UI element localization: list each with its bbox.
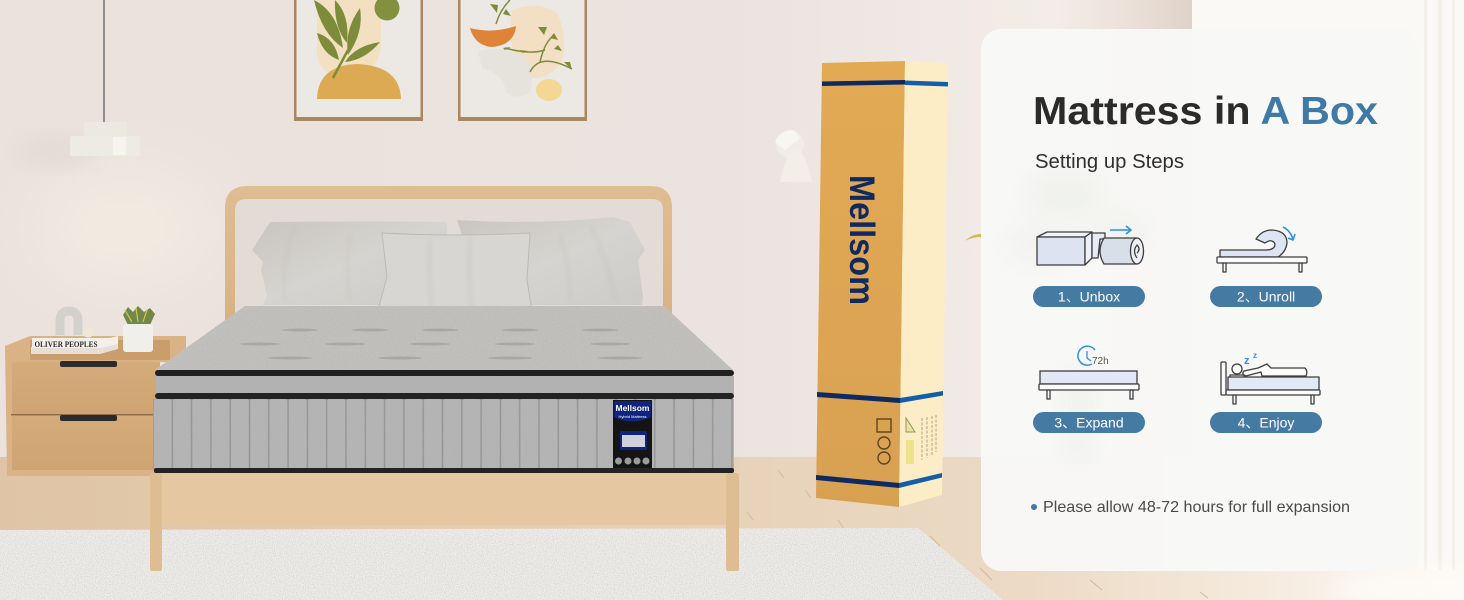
step 4: enjoy [1210,351,1322,433]
step 1: unbox [1033,226,1145,307]
mattress [153,306,734,473]
icon: box and roll [1037,226,1144,265]
headboard [225,186,672,320]
step 2: unroll [1210,227,1322,307]
book: Oliver Peoples [31,336,118,354]
expansion note: Please allow 48-72 hours for full expansion [1043,499,1350,516]
pillows [252,217,645,311]
box fine print [906,415,936,464]
subtitle: Setting up Steps [1035,151,1184,173]
icon: sleeping person: z [1244,355,1250,367]
label pill: 1、Unbox [1058,288,1120,304]
icon: clock and bed: 72h [1092,356,1109,367]
icon: unrolling mattress [1217,227,1307,272]
label pill: 2、Unroll [1237,288,1295,304]
wall art left [294,0,423,121]
pendant lamp [70,0,140,156]
mattress label: Hybrid Mattress [618,414,647,419]
potted plant [123,306,155,352]
frame [150,473,739,571]
wall art right [458,0,587,121]
yellow leaf [965,234,981,241]
mattress label: Mellsom [615,403,650,413]
bed [150,186,739,571]
icon: sleeping person: z [1253,351,1257,360]
mattress box [816,61,948,507]
box logo: Mellsom [842,175,881,305]
panel background [981,29,1418,571]
rug [0,528,1003,600]
wall sconce [775,130,812,182]
mattress label [613,400,652,468]
arch ornament [60,311,94,338]
title: Mattress in A Box [1033,90,1378,133]
icon: sleeping person [1221,351,1320,404]
blurred plant [1005,171,1150,460]
box icons [877,419,891,464]
info panel [981,29,1418,571]
step 3: expand [1033,346,1145,433]
label pill: 3、Expand [1054,414,1124,430]
nightstand [5,336,186,476]
book: Oliver Peoples: OLIVER PEOPLES [34,339,98,349]
label pill: 4、Enjoy [1238,414,1294,430]
